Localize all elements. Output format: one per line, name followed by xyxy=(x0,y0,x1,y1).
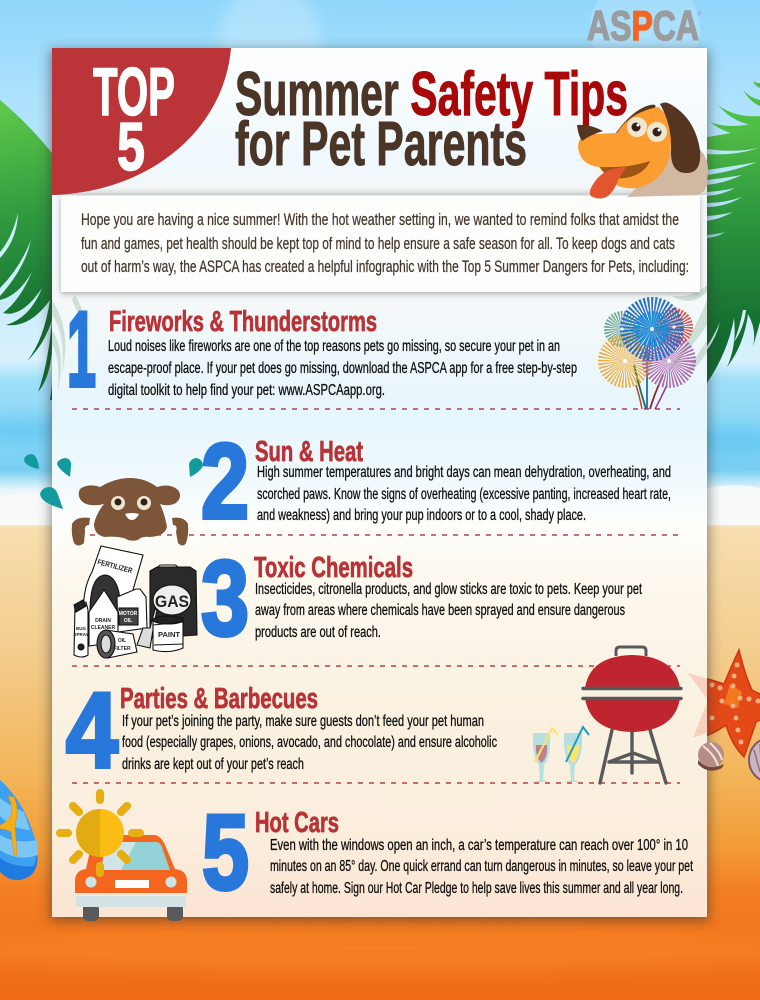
sea shells xyxy=(698,738,760,782)
title xyxy=(235,60,628,179)
icon: barbecue grill xyxy=(583,647,681,783)
faint palm and starfish ghosts on panel xyxy=(52,285,707,738)
section 3: toxic chemicals xyxy=(201,538,642,658)
heading 3: Toxic Chemicals xyxy=(254,552,413,584)
section 1: fireworks and thunderstorms xyxy=(67,289,577,409)
text 3 xyxy=(255,581,642,641)
drain cleaner bottle: DRAIN xyxy=(95,618,111,624)
drain cleaner bottle xyxy=(89,590,118,646)
intro text xyxy=(81,211,689,276)
icon: panting dog with sweat drops xyxy=(24,454,203,546)
gas can: GAS xyxy=(155,592,189,611)
section 1: fireworks and thunderstorms: 1 xyxy=(67,289,96,409)
palm leaf right xyxy=(702,81,760,383)
text 1: Loud noises like fireworks are one of the top reasons pets go missing, so secure your pet in an xyxy=(108,338,560,355)
icon: chemical containers xyxy=(73,546,197,658)
section 4: parties and barbecues xyxy=(66,670,497,790)
text 5 xyxy=(270,837,693,897)
text 1 xyxy=(108,338,577,399)
text 4 xyxy=(122,713,497,773)
dashed dividers xyxy=(72,409,680,783)
fertilizer bag: FERTILIZER xyxy=(96,557,134,575)
panel background xyxy=(52,48,707,917)
motor oil bottle xyxy=(117,589,147,632)
drain cleaner bottle: CLEANER xyxy=(91,625,115,631)
section 5: hot cars xyxy=(202,792,693,912)
section 2: sun and heat xyxy=(201,421,671,541)
heading 2: Sun & Heat xyxy=(255,436,363,468)
title: Summer Safety Tips xyxy=(235,60,628,129)
number 2: 2 xyxy=(201,421,249,541)
text 2: and weakness) and bring your pup indoors or to a cool, shady place. xyxy=(257,507,586,524)
heading 4: Parties & Barbecues xyxy=(120,683,318,715)
heading 5: Hot Cars xyxy=(255,807,339,839)
bug spray xyxy=(73,600,89,657)
number 5: 5 xyxy=(202,792,249,912)
motor oil bottle: MOTOR xyxy=(119,611,138,617)
bug spray: SPRAY xyxy=(73,632,89,637)
panel shadow xyxy=(50,50,709,921)
badge: top 5 xyxy=(52,48,231,195)
text 3: products are out of reach. xyxy=(255,624,381,641)
title: for Pet Parents xyxy=(235,110,527,179)
icon: fireworks xyxy=(612,313,684,409)
text 1: escape-proof place. If your pet does go missing, download the ASPCA app for a free step-by-step xyxy=(108,360,577,377)
intro box xyxy=(61,196,700,294)
palm leaf left xyxy=(0,100,56,400)
oil filter: OIL xyxy=(118,638,126,644)
paint brush xyxy=(137,609,157,648)
heading 1: Fireworks & Thunderstorms xyxy=(109,306,377,338)
number 4: 4 xyxy=(66,670,118,790)
icon: car under the sun xyxy=(60,793,187,921)
icon: header dog xyxy=(577,102,708,198)
text 4: food (especially grapes, onions, avocado, and chocolate) and ensure alcoholic xyxy=(122,734,497,751)
ASPCA logo: ASPCA xyxy=(587,2,699,49)
bug spray: BUG xyxy=(76,626,86,631)
flip-flop xyxy=(0,780,38,880)
icon: cocktails xyxy=(533,727,589,782)
number 3: 3 xyxy=(201,538,249,658)
badge text five: 5 xyxy=(117,109,145,185)
text 1: digital toolkit to help find your pet: www.ASPCAapp.org. xyxy=(108,382,385,399)
text 2 xyxy=(257,464,671,524)
motor oil bottle: OIL xyxy=(124,618,132,624)
ASPCA logo: ® xyxy=(697,11,702,18)
starfish xyxy=(688,650,760,757)
oil filter: FILTER xyxy=(113,646,131,652)
text 4: If your pet’s joining the party, make sure guests don’t feed your pet human xyxy=(122,713,484,730)
text 4: drinks are kept out of your pet’s reach xyxy=(122,756,304,773)
header band xyxy=(52,48,707,195)
badge text top: TOP xyxy=(93,54,175,130)
paint can: PAINT xyxy=(158,630,180,639)
oil filter xyxy=(97,630,137,658)
